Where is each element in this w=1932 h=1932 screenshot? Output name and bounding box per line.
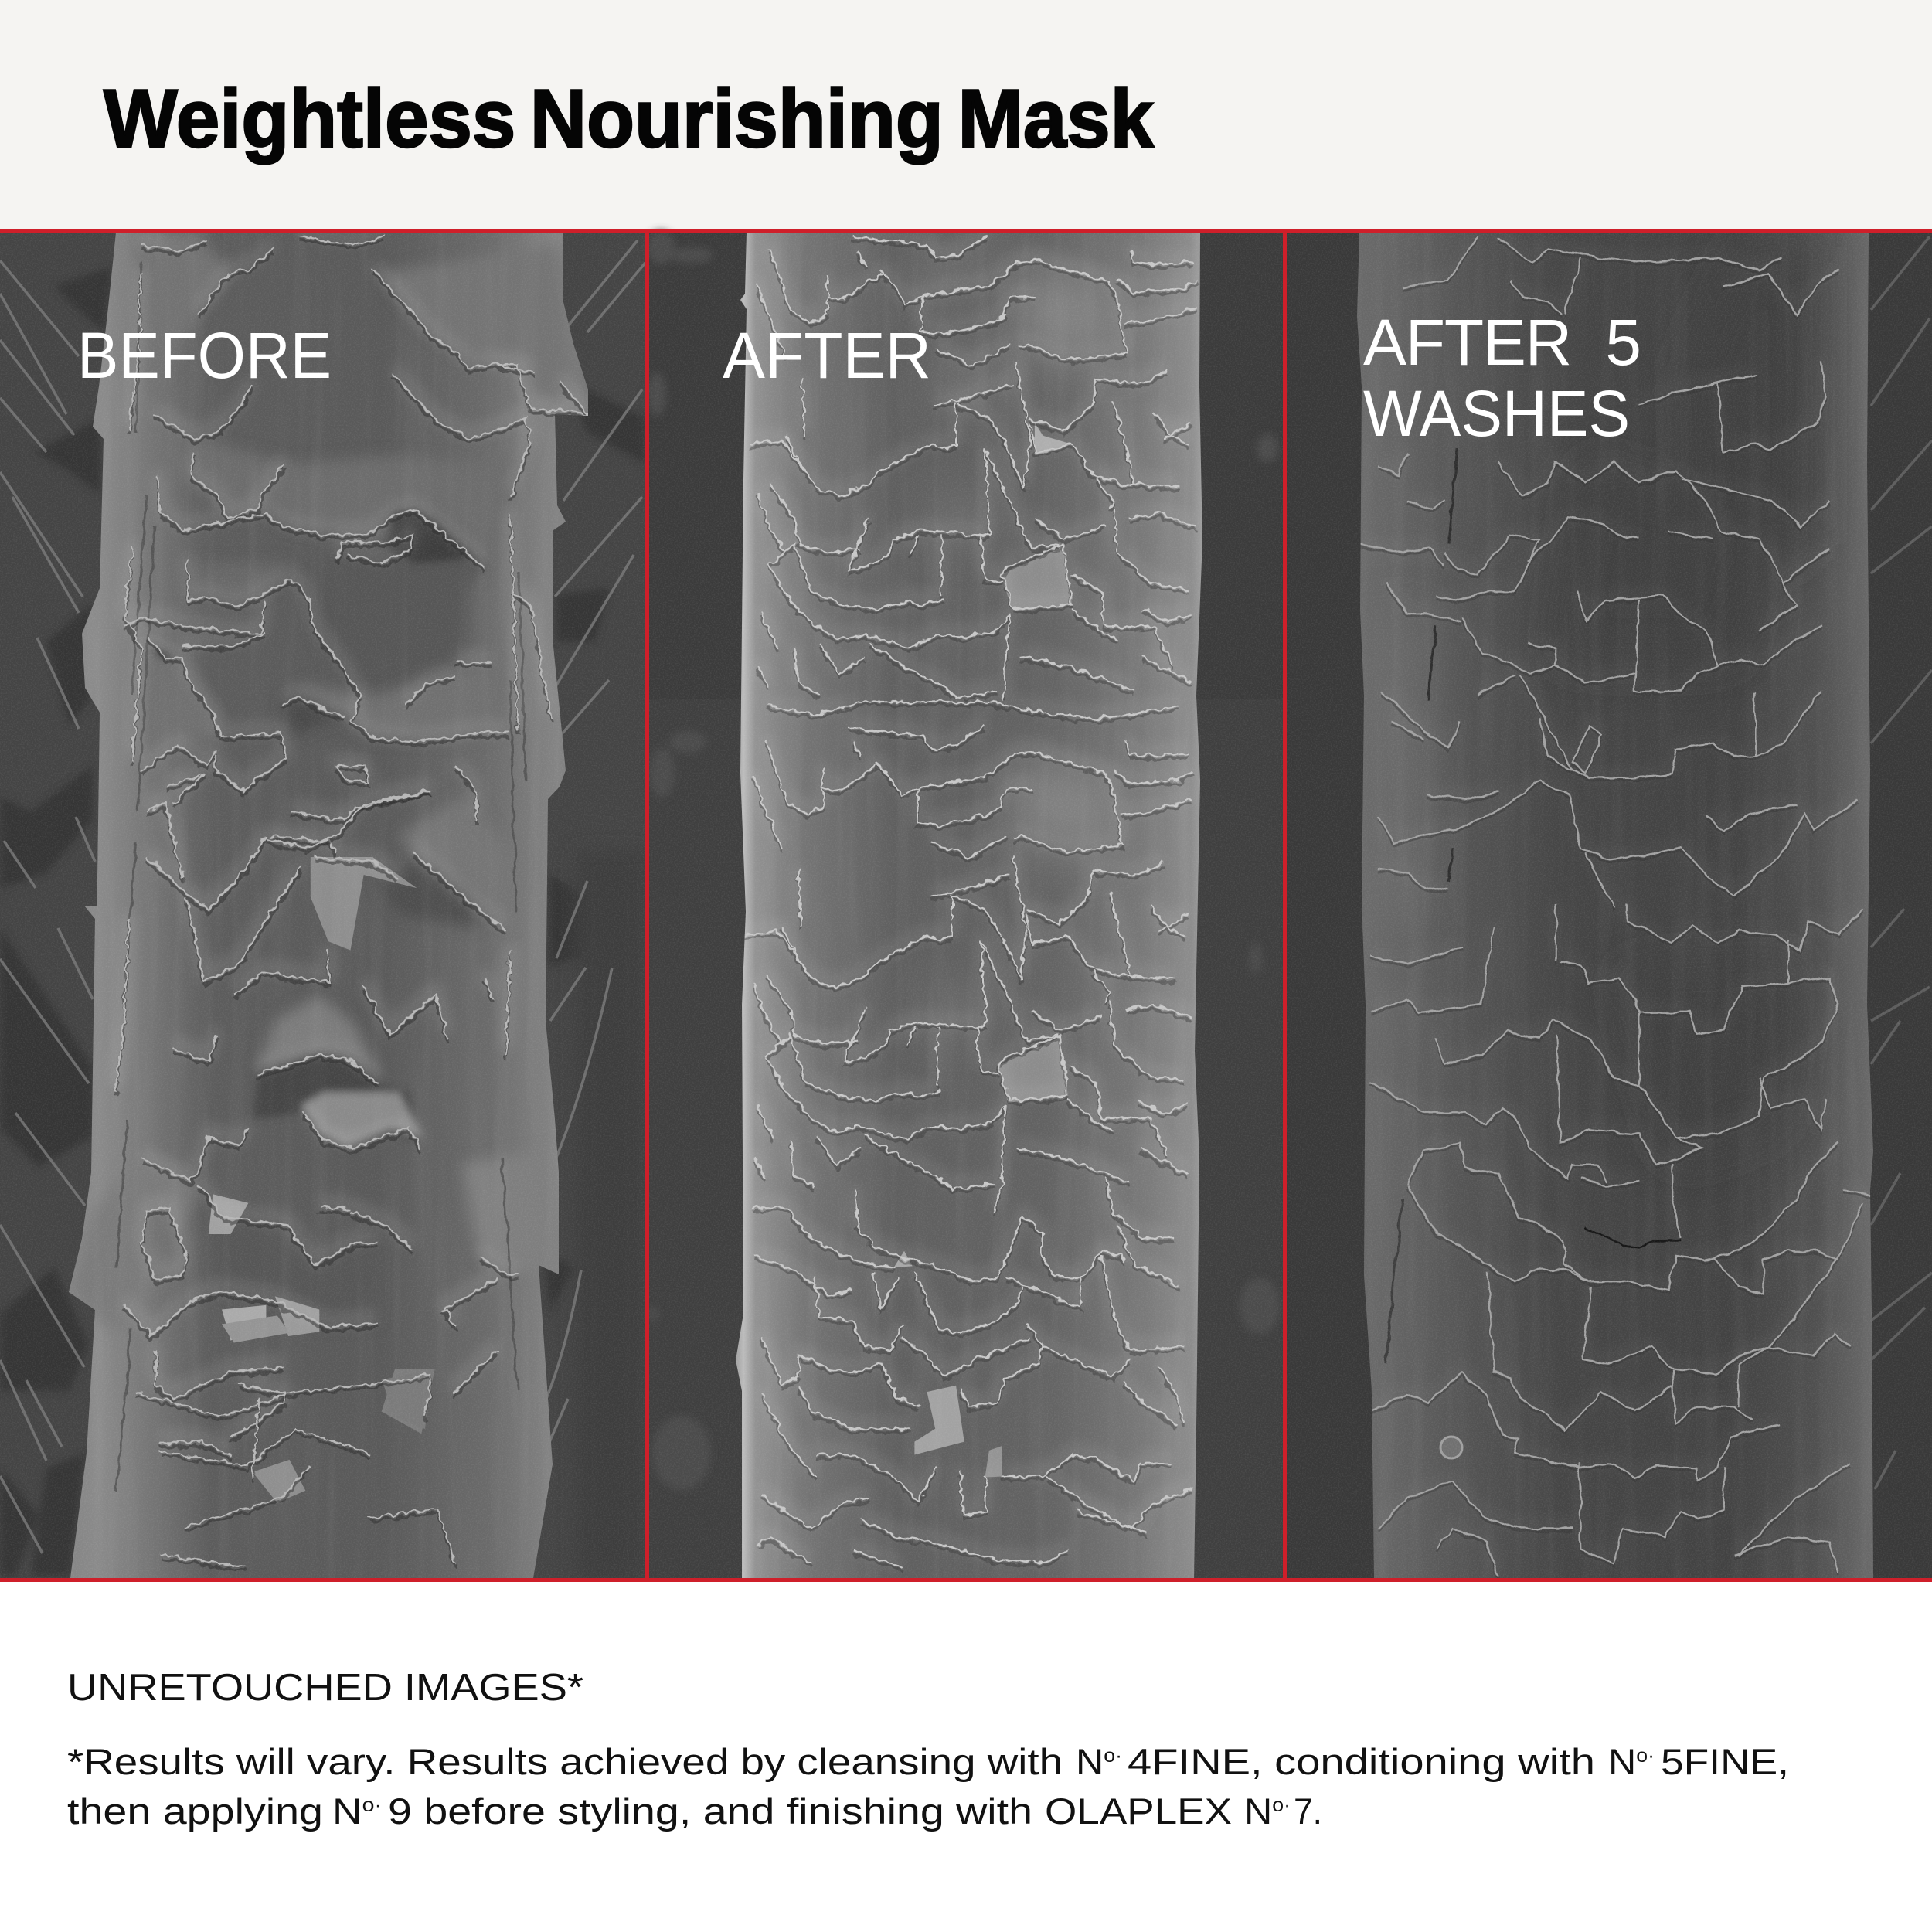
label: after 5 washes	[1363, 306, 1641, 450]
disclaimer text: ·	[1115, 1745, 1122, 1767]
scale edges	[745, 210, 1199, 1571]
soft highlights above scale edges	[1357, 232, 1871, 1572]
disclaimer text: 4FINE, conditioning with	[1128, 1741, 1595, 1782]
disclaimer text: N	[332, 1791, 359, 1832]
disclaimer text: o	[1272, 1794, 1284, 1816]
disclaimer text: N	[1244, 1791, 1270, 1832]
disclaimer text: 5FINE,	[1661, 1741, 1789, 1782]
panel: after	[647, 205, 1283, 1581]
disclaimer text: ·	[375, 1794, 382, 1816]
disclaimer text: ·	[1648, 1745, 1655, 1767]
disclaimer text: o	[1636, 1745, 1648, 1767]
disclaimer text: ·	[1284, 1794, 1291, 1816]
soft highlights above scale edges	[115, 230, 588, 1450]
disclaimer text: N	[1608, 1741, 1634, 1782]
disclaimer text: OLAPLEX	[1045, 1791, 1232, 1832]
soft highlights above scale edges	[745, 205, 1199, 1563]
panel: after 5 washes	[1287, 229, 1932, 1581]
title: Weightless Nourishing Mask	[104, 72, 1154, 165]
disclaimer text: *Results will vary. Results achieved by cleansing with	[67, 1741, 1063, 1782]
residue bead	[1440, 1437, 1462, 1458]
hair strand: damaged cuticle	[62, 229, 595, 1581]
header band	[0, 0, 1932, 229]
disclaimer text: then applying	[67, 1791, 323, 1832]
panel: before	[0, 229, 645, 1584]
disclaimer text: o	[1104, 1745, 1115, 1767]
label: after 5 washes: WASHES	[1363, 377, 1630, 450]
disclaimer text	[67, 1741, 1789, 1832]
footer band	[0, 1582, 1932, 1932]
fine image grain	[0, 233, 1932, 1578]
background with seam	[649, 229, 1283, 1581]
tonal patches	[1368, 247, 1808, 1159]
vertical striations	[1352, 233, 1878, 1578]
disclaimer text: 9 before styling, and finishing with	[388, 1791, 1032, 1832]
footer heading: UNRETOUCHED IMAGES*	[67, 1667, 583, 1709]
lit cuticle patches	[902, 249, 1126, 1027]
label: after: AFTER	[723, 319, 931, 392]
disclaimer text: o	[362, 1794, 375, 1816]
background	[1287, 229, 1932, 1581]
dark cracks along cortex edge	[116, 263, 526, 1492]
hair strand: smooth cuticle	[1352, 229, 1878, 1581]
vertical striations	[734, 233, 1206, 1578]
scale edges	[1357, 236, 1871, 1579]
background: crystalline streaks	[0, 229, 645, 1584]
lit and shadowed cuticle flaps	[71, 244, 576, 1336]
label: after 5 washes: AFTER 5	[1363, 306, 1641, 379]
red grid frame	[0, 229, 1932, 1582]
background streaks at right	[1871, 236, 1932, 1489]
label: before: BEFORE	[77, 319, 332, 392]
disclaimer text: 7.	[1294, 1791, 1322, 1832]
vertical striations	[62, 233, 595, 1578]
scale edges	[115, 236, 588, 1570]
disclaimer text: N	[1076, 1741, 1102, 1782]
hair strand: smoother cuticle	[734, 205, 1206, 1581]
